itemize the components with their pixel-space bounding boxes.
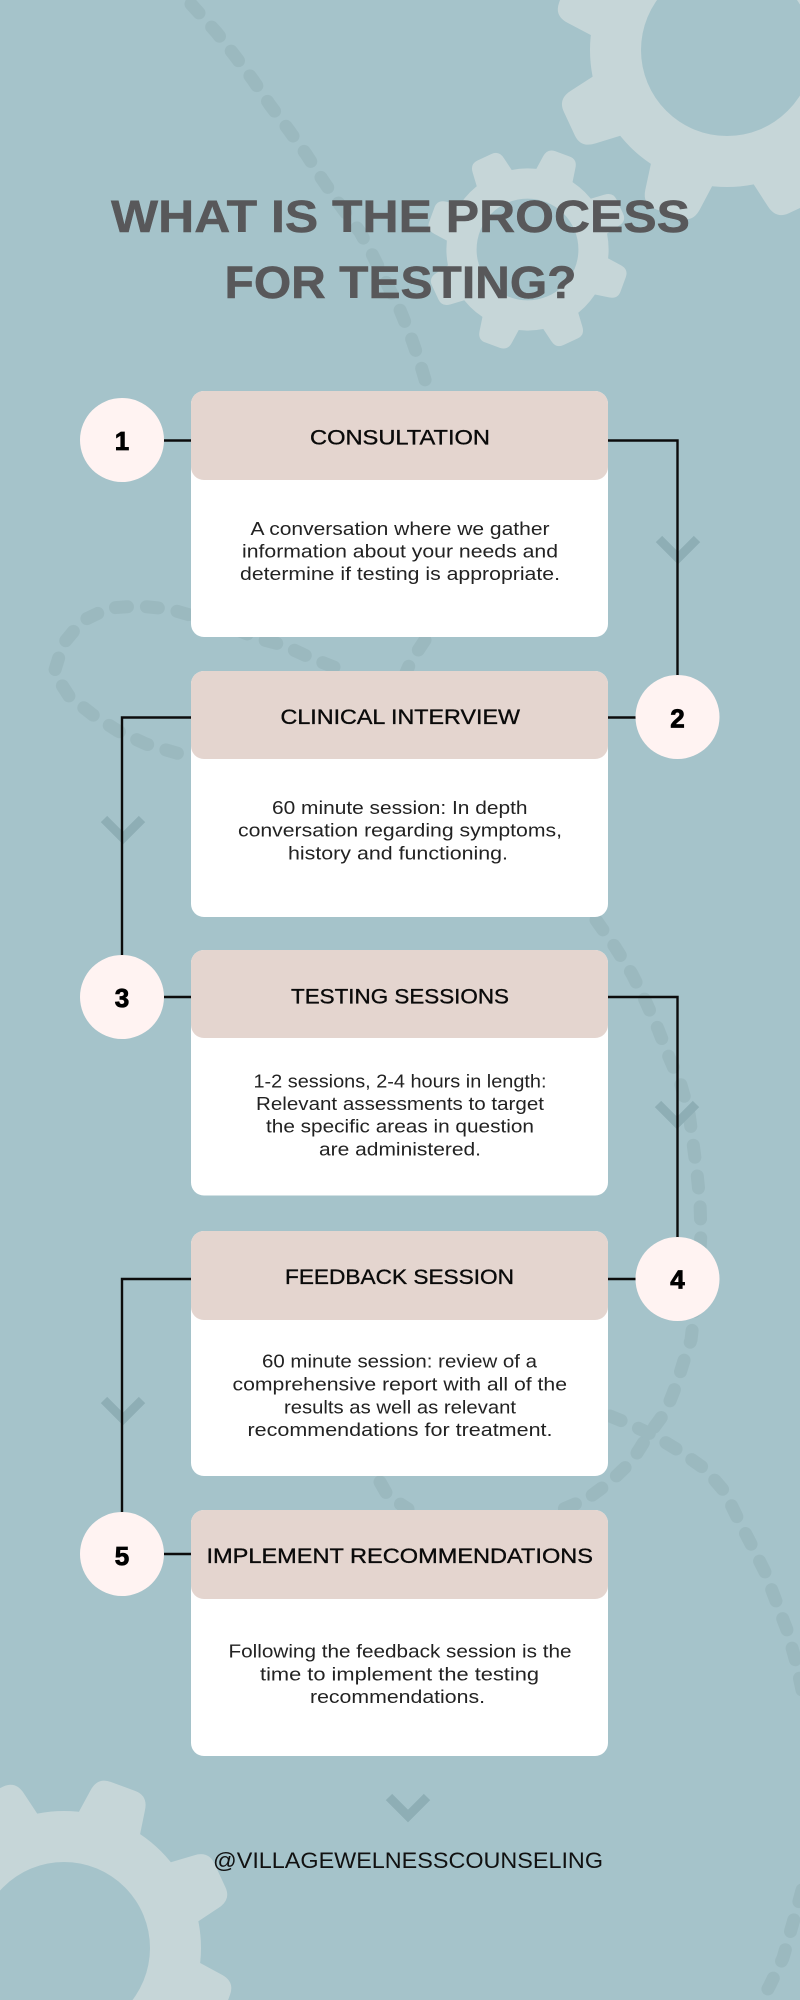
- step 3 description: [254, 1070, 546, 1160]
- step 4 description: 60 minute session: review of a: [262, 1350, 538, 1372]
- step 3 description: Relevant assessments to target: [256, 1093, 544, 1114]
- step 2 description: history and functioning.: [288, 842, 508, 864]
- connector: step 5 to card: [164, 1553, 191, 1555]
- icon: small gear behind title: [425, 147, 630, 352]
- step badge 5: [80, 1512, 164, 1596]
- panel: step 2 clinical interview: [191, 671, 608, 917]
- step 2 description: 60 minute session: In depth: [272, 797, 528, 818]
- connector: step 3 to step 4: [164, 997, 678, 1240]
- step badge 4: 4: [670, 1264, 685, 1294]
- step 1 header: [191, 391, 608, 480]
- step 5 description: Following the feedback session is the: [228, 1640, 572, 1662]
- step badge 3: [80, 955, 164, 1039]
- step 4 description: comprehensive report with all of the: [232, 1374, 567, 1394]
- panel: step 1 consultation: [191, 391, 608, 637]
- step 5 heading: IMPLEMENT RECOMMENDATIONS: [206, 1545, 593, 1568]
- connector: step 2 to step 3: [122, 718, 640, 960]
- icon: large gear top right: [558, 0, 800, 220]
- step 4 description: [232, 1350, 567, 1440]
- title: WHAT IS THE PROCESS: [111, 191, 690, 242]
- step 3 description: are administered.: [319, 1138, 481, 1160]
- arrow: chevron above handle: [389, 1797, 427, 1816]
- step 1 description: information about your needs and: [242, 540, 558, 562]
- arrow: chevron between steps 1 and 2: [659, 539, 697, 558]
- step badge 4: [636, 1237, 720, 1321]
- step 3 header: [191, 950, 608, 1038]
- step badge 5: 5: [115, 1541, 129, 1571]
- step 3 description: 1-2 sessions, 2-4 hours in length:: [254, 1070, 546, 1092]
- step 3 heading: TESTING SESSIONS: [291, 986, 509, 1008]
- panel: step 4 feedback session: [191, 1231, 608, 1476]
- step 2 header: [191, 671, 608, 759]
- panel: step 3 testing sessions: [191, 950, 608, 1196]
- step 1 heading: CONSULTATION: [310, 426, 490, 450]
- step badge 2: [636, 675, 720, 759]
- step 1 description: determine if testing is appropriate.: [240, 563, 560, 584]
- step 1 description: A conversation where we gather: [250, 518, 550, 539]
- arrow: chevron between steps 3 and 4: [658, 1104, 696, 1123]
- step 4 description: results as well as relevant: [284, 1396, 516, 1418]
- connector: step 4 to step 5: [122, 1279, 640, 1515]
- step 4 description: recommendations for treatment.: [248, 1419, 552, 1440]
- footer handle: @VILLAGEWELNESSCOUNSELING: [213, 1848, 603, 1873]
- step badge 1: [80, 398, 164, 482]
- step 5 description: recommendations.: [310, 1686, 485, 1707]
- step 2 description: [238, 797, 562, 864]
- arrow: chevron between steps 4 and 5: [104, 1400, 142, 1419]
- step 4 heading: FEEDBACK SESSION: [285, 1266, 514, 1289]
- step badge 3: 3: [115, 983, 129, 1013]
- step 5 description: time to implement the testing: [260, 1664, 539, 1684]
- title: [111, 191, 690, 308]
- title: FOR TESTING?: [224, 257, 576, 308]
- step 2 description: conversation regarding symptoms,: [238, 820, 562, 840]
- step badge 2: 2: [670, 704, 685, 734]
- panel: step 5 implement recommendations: [191, 1510, 608, 1756]
- arrow: chevron between steps 2 and 3: [104, 819, 142, 838]
- step 2 heading: CLINICAL INTERVIEW: [280, 706, 520, 729]
- step 1 description: [240, 518, 560, 584]
- icon: large gear bottom left: [0, 1780, 232, 2000]
- step 5 description: [228, 1640, 572, 1707]
- connector: step 1 to step 2: [164, 440, 678, 680]
- step 3 description: the specific areas in question: [266, 1116, 534, 1136]
- step 4 header: [191, 1231, 608, 1320]
- step 5 header: [191, 1510, 608, 1599]
- step badge 1: 1: [115, 426, 129, 456]
